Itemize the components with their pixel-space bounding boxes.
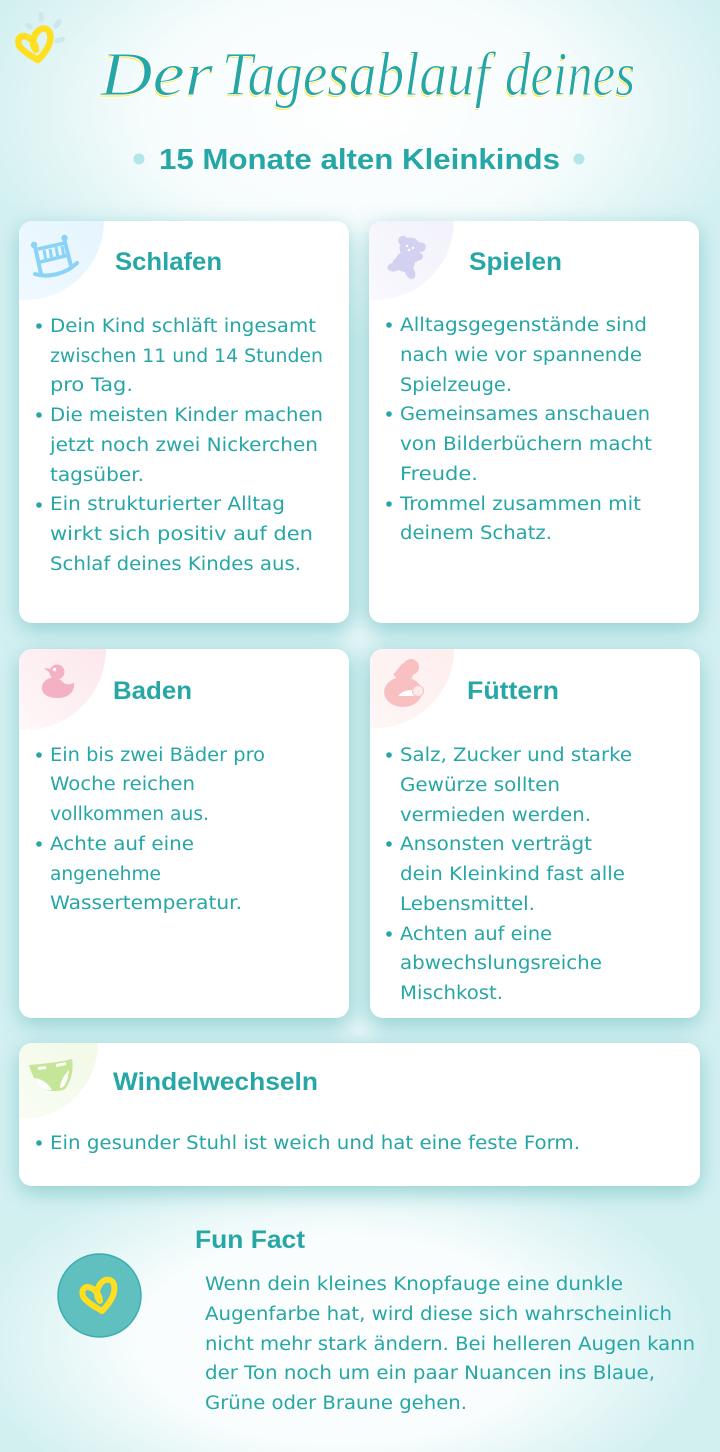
list: Schlafen: wirkt sich positiv auf den xyxy=(50,524,313,545)
panel: Baden xyxy=(7,643,360,1036)
list: Spielen: deinem Schatz. xyxy=(400,523,552,544)
list: Schlafen: zwischen 11 und 14 Stunden xyxy=(50,346,323,367)
icon: fun fact heart badge xyxy=(58,1254,141,1337)
list: Spielen: Alltagsgegenstände sind xyxy=(400,315,647,336)
list: Füttern: vermieden werden. xyxy=(400,805,591,826)
icon: crib xyxy=(31,235,77,276)
heading: Fun Fact: Fun Fact xyxy=(195,1226,306,1254)
heading: Schlafen: Schlafen xyxy=(115,248,222,276)
list: Schlafen: Ein strukturierter Alltag xyxy=(50,494,285,515)
title: deines xyxy=(504,43,634,111)
list: Schlafen: jetzt noch zwei Nickerchen xyxy=(49,435,318,456)
list: Füttern: Ansonsten verträgt xyxy=(400,834,592,855)
panel: Schlafen xyxy=(0,142,349,623)
list: Spielen: nach wie vor spannende xyxy=(400,345,642,366)
list: Spielen xyxy=(386,315,652,544)
list: Füttern: abwechslungsreiche xyxy=(400,953,602,974)
panel: Füttern xyxy=(359,643,712,1036)
list: Windelwechseln: Ein gesunder Stuhl ist weich und hat eine feste Form. xyxy=(50,1133,580,1154)
title: Der xyxy=(99,41,214,109)
title: deines xyxy=(505,41,635,109)
title xyxy=(98,41,635,111)
icon: diaper xyxy=(29,1059,73,1091)
list: Spielen: Freude. xyxy=(400,464,478,485)
list: Schlafen: tagsüber. xyxy=(50,465,144,486)
list: Schlafen: pro Tag. xyxy=(50,375,133,396)
icon: rubber duck xyxy=(42,664,74,698)
title: Tagesablauf xyxy=(221,43,496,111)
list: Schlafen: Schlaf deines Kindes aus. xyxy=(50,554,301,575)
list: Füttern: Lebensmittel. xyxy=(400,894,535,915)
icon: teddy bear xyxy=(387,236,426,281)
heading: Füttern: Füttern xyxy=(467,677,559,705)
list: Baden: Ein bis zwei Bäder pro xyxy=(50,745,265,766)
subtitle: 15 Monate alten Kleinkinds xyxy=(159,144,560,176)
list: Schlafen xyxy=(36,316,323,575)
list: Schlafen: Die meisten Kinder machen xyxy=(50,405,323,426)
text block: Fun Fact: Grüne oder Braune gehen. xyxy=(205,1393,467,1414)
list: Spielen: von Bilderbüchern macht xyxy=(400,434,652,455)
list: Baden: angenehme xyxy=(50,864,161,885)
heading: Baden: Baden xyxy=(113,677,192,705)
heading: Spielen: Spielen xyxy=(469,248,562,276)
list: Spielen: Trommel zusammen mit xyxy=(399,494,641,515)
text block: Fun Fact: der Ton noch um ein paar Nuancen ins Blaue, xyxy=(205,1363,655,1384)
icon: mother feeding baby xyxy=(384,659,424,707)
logo: heart with rays xyxy=(18,12,65,60)
list: Baden: vollkommen aus. xyxy=(50,804,209,825)
text block: Fun Fact xyxy=(205,1274,695,1414)
list: Füttern: Salz, Zucker und starke xyxy=(400,745,632,766)
list: Füttern: dein Kleinkind fast alle xyxy=(400,864,625,885)
text block: Fun Fact: Augenfarbe hat, wird diese sich wahrscheinlich xyxy=(205,1304,672,1325)
title: Der xyxy=(98,43,213,111)
list: Baden: Achte auf eine xyxy=(50,834,194,855)
title: Tagesablauf xyxy=(222,41,497,109)
list: Füttern: Achten auf eine xyxy=(400,924,552,945)
text block: Fun Fact: nicht mehr stark ändern. Bei helleren Augen kann xyxy=(205,1334,695,1355)
list: Spielen: Gemeinsames anschauen xyxy=(400,404,650,425)
list: Baden: Woche reichen xyxy=(50,774,195,795)
list: Baden xyxy=(36,745,265,914)
list: Füttern: Gewürze sollten xyxy=(400,775,560,796)
panel: Spielen xyxy=(356,212,711,641)
heading: Windelwechseln: Windelwechseln xyxy=(113,1068,318,1096)
list: Füttern xyxy=(386,745,632,1004)
list: Spielen: Spielzeuge. xyxy=(400,375,512,396)
list: Füttern: Mischkost. xyxy=(400,983,503,1004)
text block: Fun Fact: Wenn dein kleines Knopfauge eine dunkle xyxy=(205,1274,623,1295)
panel: Windelwechseln xyxy=(7,1036,712,1206)
list: Schlafen: Dein Kind schläft ingesamt xyxy=(50,316,316,337)
list: Baden: Wassertemperatur. xyxy=(50,893,242,914)
